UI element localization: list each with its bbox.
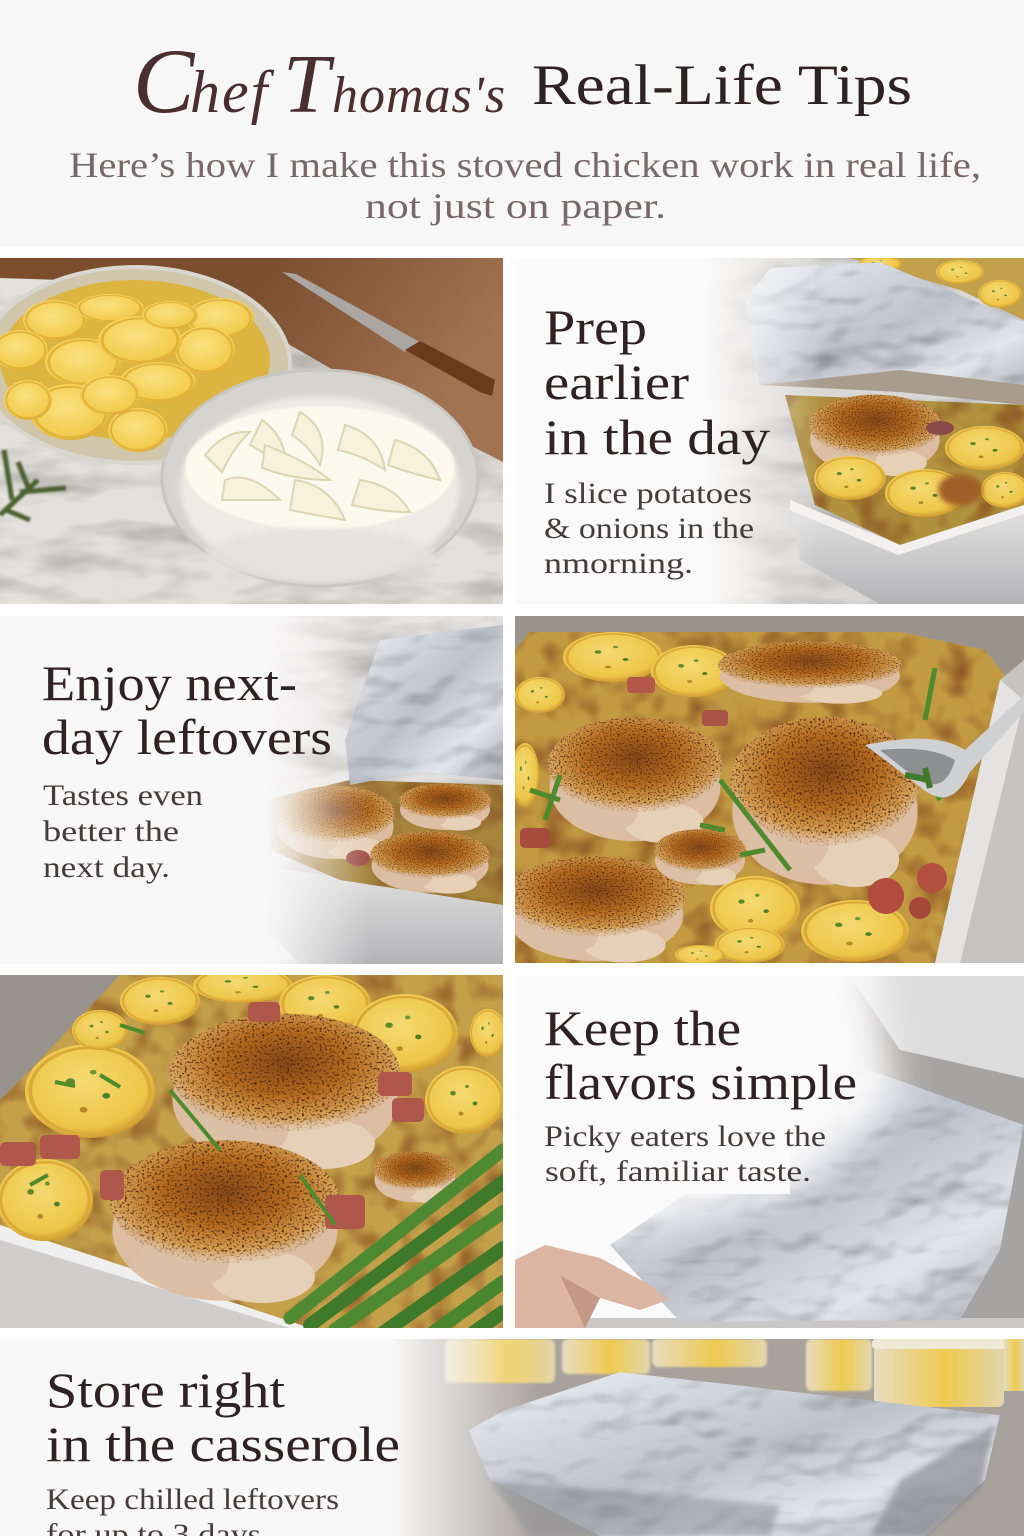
body text: I slice potatoes [544,477,752,510]
heading: Store right [46,1362,285,1418]
body text [545,1126,825,1186]
green beans [290,1150,503,1335]
heading: flavors simple [544,1054,857,1110]
title: Real-Life Tips [532,54,912,117]
panel: prep earlier in the day [515,256,1024,604]
white fade [515,258,820,604]
panel: potatoes and onions photo [0,258,503,604]
foil-wrapped casserole [468,1372,1000,1536]
cutting board [0,258,503,462]
body text [544,477,754,580]
body text: & onions in the [544,512,754,545]
body text: better the [43,815,179,848]
pan edges [0,975,310,1328]
potato slices [0,967,506,1241]
panel: store right in the casserole [0,1339,1024,1536]
body text: next day. [43,851,170,884]
ham and herbs [520,668,947,919]
potato slices [511,632,909,965]
icon: knife [282,272,495,396]
foil [345,625,503,785]
foil cover [745,262,1024,405]
white fade [0,616,370,964]
body text: Tastes even [43,779,203,812]
icon: hand [515,1245,668,1328]
chicken thighs [505,641,920,963]
body text: Picky eaters love the [544,1120,826,1153]
white fade [610,976,916,1252]
herb flecks [30,1025,335,1225]
body text: Keep chilled leftovers [46,1483,339,1516]
foil-wrapped dish [610,1070,1024,1322]
baking dish with chicken [272,780,503,964]
heading: earlier [544,354,689,410]
white fade [0,1339,540,1536]
title: C [133,30,196,132]
casserole dish with food [785,395,1024,604]
heading: Enjoy next- [42,655,297,711]
title [133,30,912,132]
subtitle: not just on paper. [365,186,666,226]
heading: day leftovers [42,709,332,765]
cups in the background [445,1339,1024,1407]
heading: Keep the [544,1000,741,1056]
title: hef [190,59,275,125]
title: homas's [332,67,506,124]
panel: chicken casserole close-up photo [505,616,1024,965]
heading [46,1362,400,1472]
heading [44,667,330,764]
heading [544,299,770,465]
subtitle: Here’s how I make this stoved chicken work in real life, [69,145,981,185]
header panel [0,0,1024,247]
panel: chicken with potatoes and green beans photo [0,967,506,1335]
bowl of chopped onions [162,370,478,586]
subtitle [69,145,981,226]
bowl of sliced potatoes [0,267,290,463]
title: T [283,38,335,131]
heading: in the casserole [46,1416,400,1472]
heading [546,1010,856,1110]
panel: keep the flavors simple [515,976,1024,1328]
body text [43,779,203,884]
body text [46,1483,339,1536]
chicken thighs [110,1014,456,1303]
heading: Prep [544,299,647,355]
pan rim [515,616,1024,963]
icon: herb sprig [0,450,66,520]
body text: soft, familiar taste. [545,1155,811,1188]
potato dish background [850,256,1024,320]
background counter and tray [585,976,1024,1328]
body text: nmorning. [544,547,693,580]
icon: serving spoon [865,695,1024,797]
ham pieces [0,1002,424,1229]
heading: in the day [544,409,770,465]
panel: enjoy next-day leftovers [0,616,503,964]
